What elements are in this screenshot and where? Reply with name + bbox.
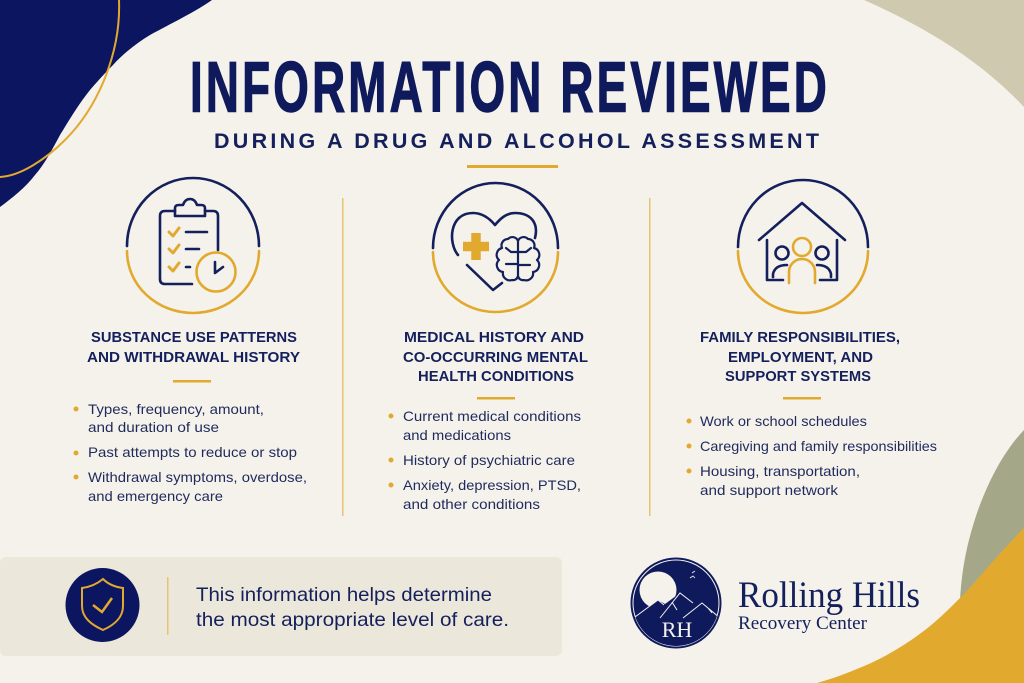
heading: EMPLOYMENT, AND xyxy=(728,349,873,366)
icon: clipboard and clock xyxy=(127,178,259,313)
heading rule xyxy=(477,397,515,400)
decorative shape: bottom-right gold xyxy=(817,528,1024,683)
decorative shape: top-right taupe xyxy=(864,0,1024,107)
logo: RH xyxy=(662,617,692,642)
logo: Rolling Hills xyxy=(738,575,920,616)
subtitle: DURING A DRUG AND ALCOHOL ASSESSMENT xyxy=(214,129,819,153)
heading xyxy=(87,329,300,366)
bullet list: and support network xyxy=(700,482,839,498)
icon: shield xyxy=(66,568,140,642)
bullet list: and medications xyxy=(403,427,511,443)
heading: SUPPORT SYSTEMS xyxy=(725,368,871,385)
heading: MEDICAL HISTORY AND xyxy=(404,329,584,346)
heading rule xyxy=(783,397,821,400)
column dividers xyxy=(342,198,650,516)
panel: substance use xyxy=(74,178,307,504)
decorative shape: top-left navy xyxy=(0,0,212,207)
heading xyxy=(403,329,588,385)
bullet list: Caregiving and family responsibilities xyxy=(700,438,937,454)
bullet list: and other conditions xyxy=(403,496,540,512)
bullet list: Withdrawal symptoms, overdose, xyxy=(88,469,307,485)
bullet list: History of psychiatric care xyxy=(403,452,575,468)
bullet list xyxy=(388,408,581,512)
bullet list: Past attempts to reduce or stop xyxy=(88,444,297,460)
callout text: This information helps determine xyxy=(196,584,492,606)
decorative shape: right olive xyxy=(960,430,1024,600)
heading: HEALTH CONDITIONS xyxy=(418,368,574,385)
panel: medical history xyxy=(388,183,588,512)
bullet list: and emergency care xyxy=(88,488,223,504)
bullet list: Types, frequency, amount, xyxy=(88,401,264,417)
icon: heart, cross and brain xyxy=(433,183,558,312)
heading rule xyxy=(173,380,211,382)
bullet list: and duration of use xyxy=(88,419,219,435)
heading: CO-OCCURRING MENTAL xyxy=(403,349,588,366)
callout text: the most appropriate level of care. xyxy=(196,609,509,631)
bullet list: Current medical conditions xyxy=(403,408,581,424)
bullet list: Anxiety, depression, PTSD, xyxy=(403,477,581,493)
logo xyxy=(630,558,920,650)
heading: AND WITHDRAWAL HISTORY xyxy=(87,349,300,366)
heading xyxy=(700,329,900,385)
bullet list: Work or school schedules xyxy=(700,413,867,429)
logo: Recovery Center xyxy=(738,614,867,634)
callout text xyxy=(196,584,509,631)
heading: SUBSTANCE USE PATTERNS xyxy=(91,329,297,346)
panel: family xyxy=(686,180,937,498)
heading: FAMILY RESPONSIBILITIES, xyxy=(700,329,900,346)
icon: house and family xyxy=(738,180,868,313)
bullet list: Housing, transportation, xyxy=(700,463,860,479)
callout xyxy=(0,557,562,656)
title underline xyxy=(467,165,558,168)
bullet list xyxy=(74,401,307,504)
bullet list xyxy=(686,413,937,498)
